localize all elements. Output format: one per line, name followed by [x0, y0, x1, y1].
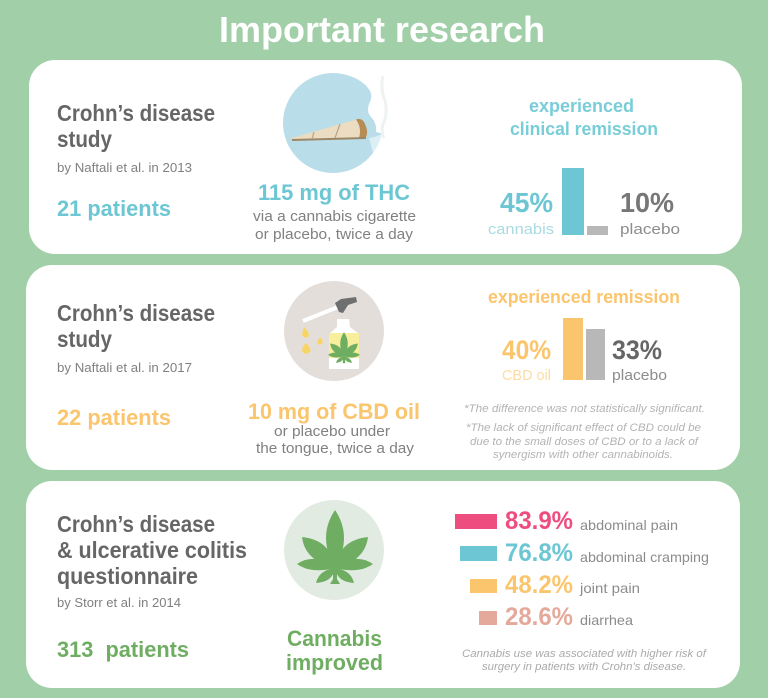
heading: study 2: [57, 300, 215, 352]
heading: study 1: study: [57, 126, 112, 152]
bar chart: symptoms improved: [455, 507, 709, 631]
dose description: the tongue, twice a day: [256, 441, 415, 457]
bar chart: symptoms improved: abdominal cramping: [580, 549, 709, 565]
icon: cannabis cigarette: [283, 72, 392, 173]
bar chart: symptoms improved: 28.6%: [505, 603, 573, 631]
heading: study 1: [57, 100, 215, 152]
heading: study 3: questionnaire: [57, 563, 198, 589]
footnotes: synergism with other cannabinoids.: [493, 449, 673, 461]
footnotes: *The difference was not statistically significant.: [464, 403, 705, 415]
chart heading: [510, 96, 658, 139]
bar chart: remission: 40%: [502, 335, 551, 365]
icon: CBD oil dropper bottle: [284, 281, 384, 381]
title: Important research: [219, 9, 545, 50]
bar chart: symptoms improved: abdominal pain: [580, 517, 678, 533]
heading: study 2: study: [57, 326, 112, 352]
chart heading: clinical remission: [510, 119, 658, 139]
bar chart: symptoms improved: 48.2%: [505, 571, 573, 599]
chart heading: experienced: [529, 96, 634, 116]
bar chart: symptoms improved: joint pain: [579, 580, 640, 596]
footnotes: due to the small doses of CBD or to a lack of: [470, 436, 699, 448]
patient count: 313 patients: [57, 637, 189, 662]
author credit: by Naftali et al. in 2013: [57, 161, 192, 175]
footnotes: [464, 403, 705, 461]
chart heading: experienced remission: [488, 287, 680, 307]
author credit: by Storr et al. in 2014: [57, 596, 181, 610]
bar chart: clinical remission: placebo: [620, 221, 680, 238]
result: cannabis improved: improved: [286, 650, 383, 675]
dose description: via a cannabis cigarette: [253, 209, 416, 225]
footnote: Cannabis use was associated with higher risk of: [462, 648, 707, 660]
heading: study 3: [57, 511, 247, 589]
dose description: or placebo under: [274, 424, 390, 440]
footnote: [462, 648, 707, 673]
result: cannabis improved: Cannabis: [287, 626, 382, 651]
bar chart: symptoms improved: 76.8%: [505, 539, 573, 567]
heading: study 3: & ulcerative colitis: [57, 537, 247, 563]
bar chart: clinical remission: 10%: [620, 187, 674, 218]
dose: 115 mg of THC: 115 mg of THC: [258, 180, 410, 205]
heading: study 1: Crohn’s disease: [57, 100, 215, 126]
result: cannabis improved: [286, 626, 383, 675]
bar chart: clinical remission: 45%: [500, 187, 553, 218]
bar chart: clinical remission: [488, 168, 680, 238]
dose description: or placebo, twice a day: [255, 227, 414, 243]
dose description: [256, 424, 415, 457]
heading: study 3: Crohn’s disease: [57, 511, 215, 537]
icon: cannabis leaf: [284, 500, 384, 600]
author credit: by Naftali et al. in 2017: [57, 361, 192, 375]
heading: study 2: Crohn’s disease: [57, 300, 215, 326]
panel: 2013 THC study: [29, 60, 742, 254]
dose: 10 mg of CBD oil: 10 mg of CBD oil: [248, 399, 420, 424]
bar chart: remission: placebo: [612, 367, 667, 384]
panel: 2014 questionnaire: [26, 481, 740, 688]
bar chart: symptoms improved: 83.9%: [505, 507, 573, 535]
bar chart: remission: [502, 318, 667, 384]
bar chart: clinical remission: cannabis: [488, 221, 554, 238]
footnotes: *The lack of significant effect of CBD could be: [466, 422, 701, 434]
dose description: [253, 209, 416, 243]
bar chart: symptoms improved: diarrhea: [580, 612, 633, 628]
bar chart: remission: CBD oil: [502, 367, 551, 384]
patient count: 21 patients: [57, 196, 171, 221]
patient count: 22 patients: [57, 405, 171, 430]
bar chart: remission: 33%: [612, 335, 662, 365]
panel: 2017 CBD study: [26, 265, 740, 470]
footnote: surgery in patients with Crohn’s disease.: [482, 661, 686, 673]
